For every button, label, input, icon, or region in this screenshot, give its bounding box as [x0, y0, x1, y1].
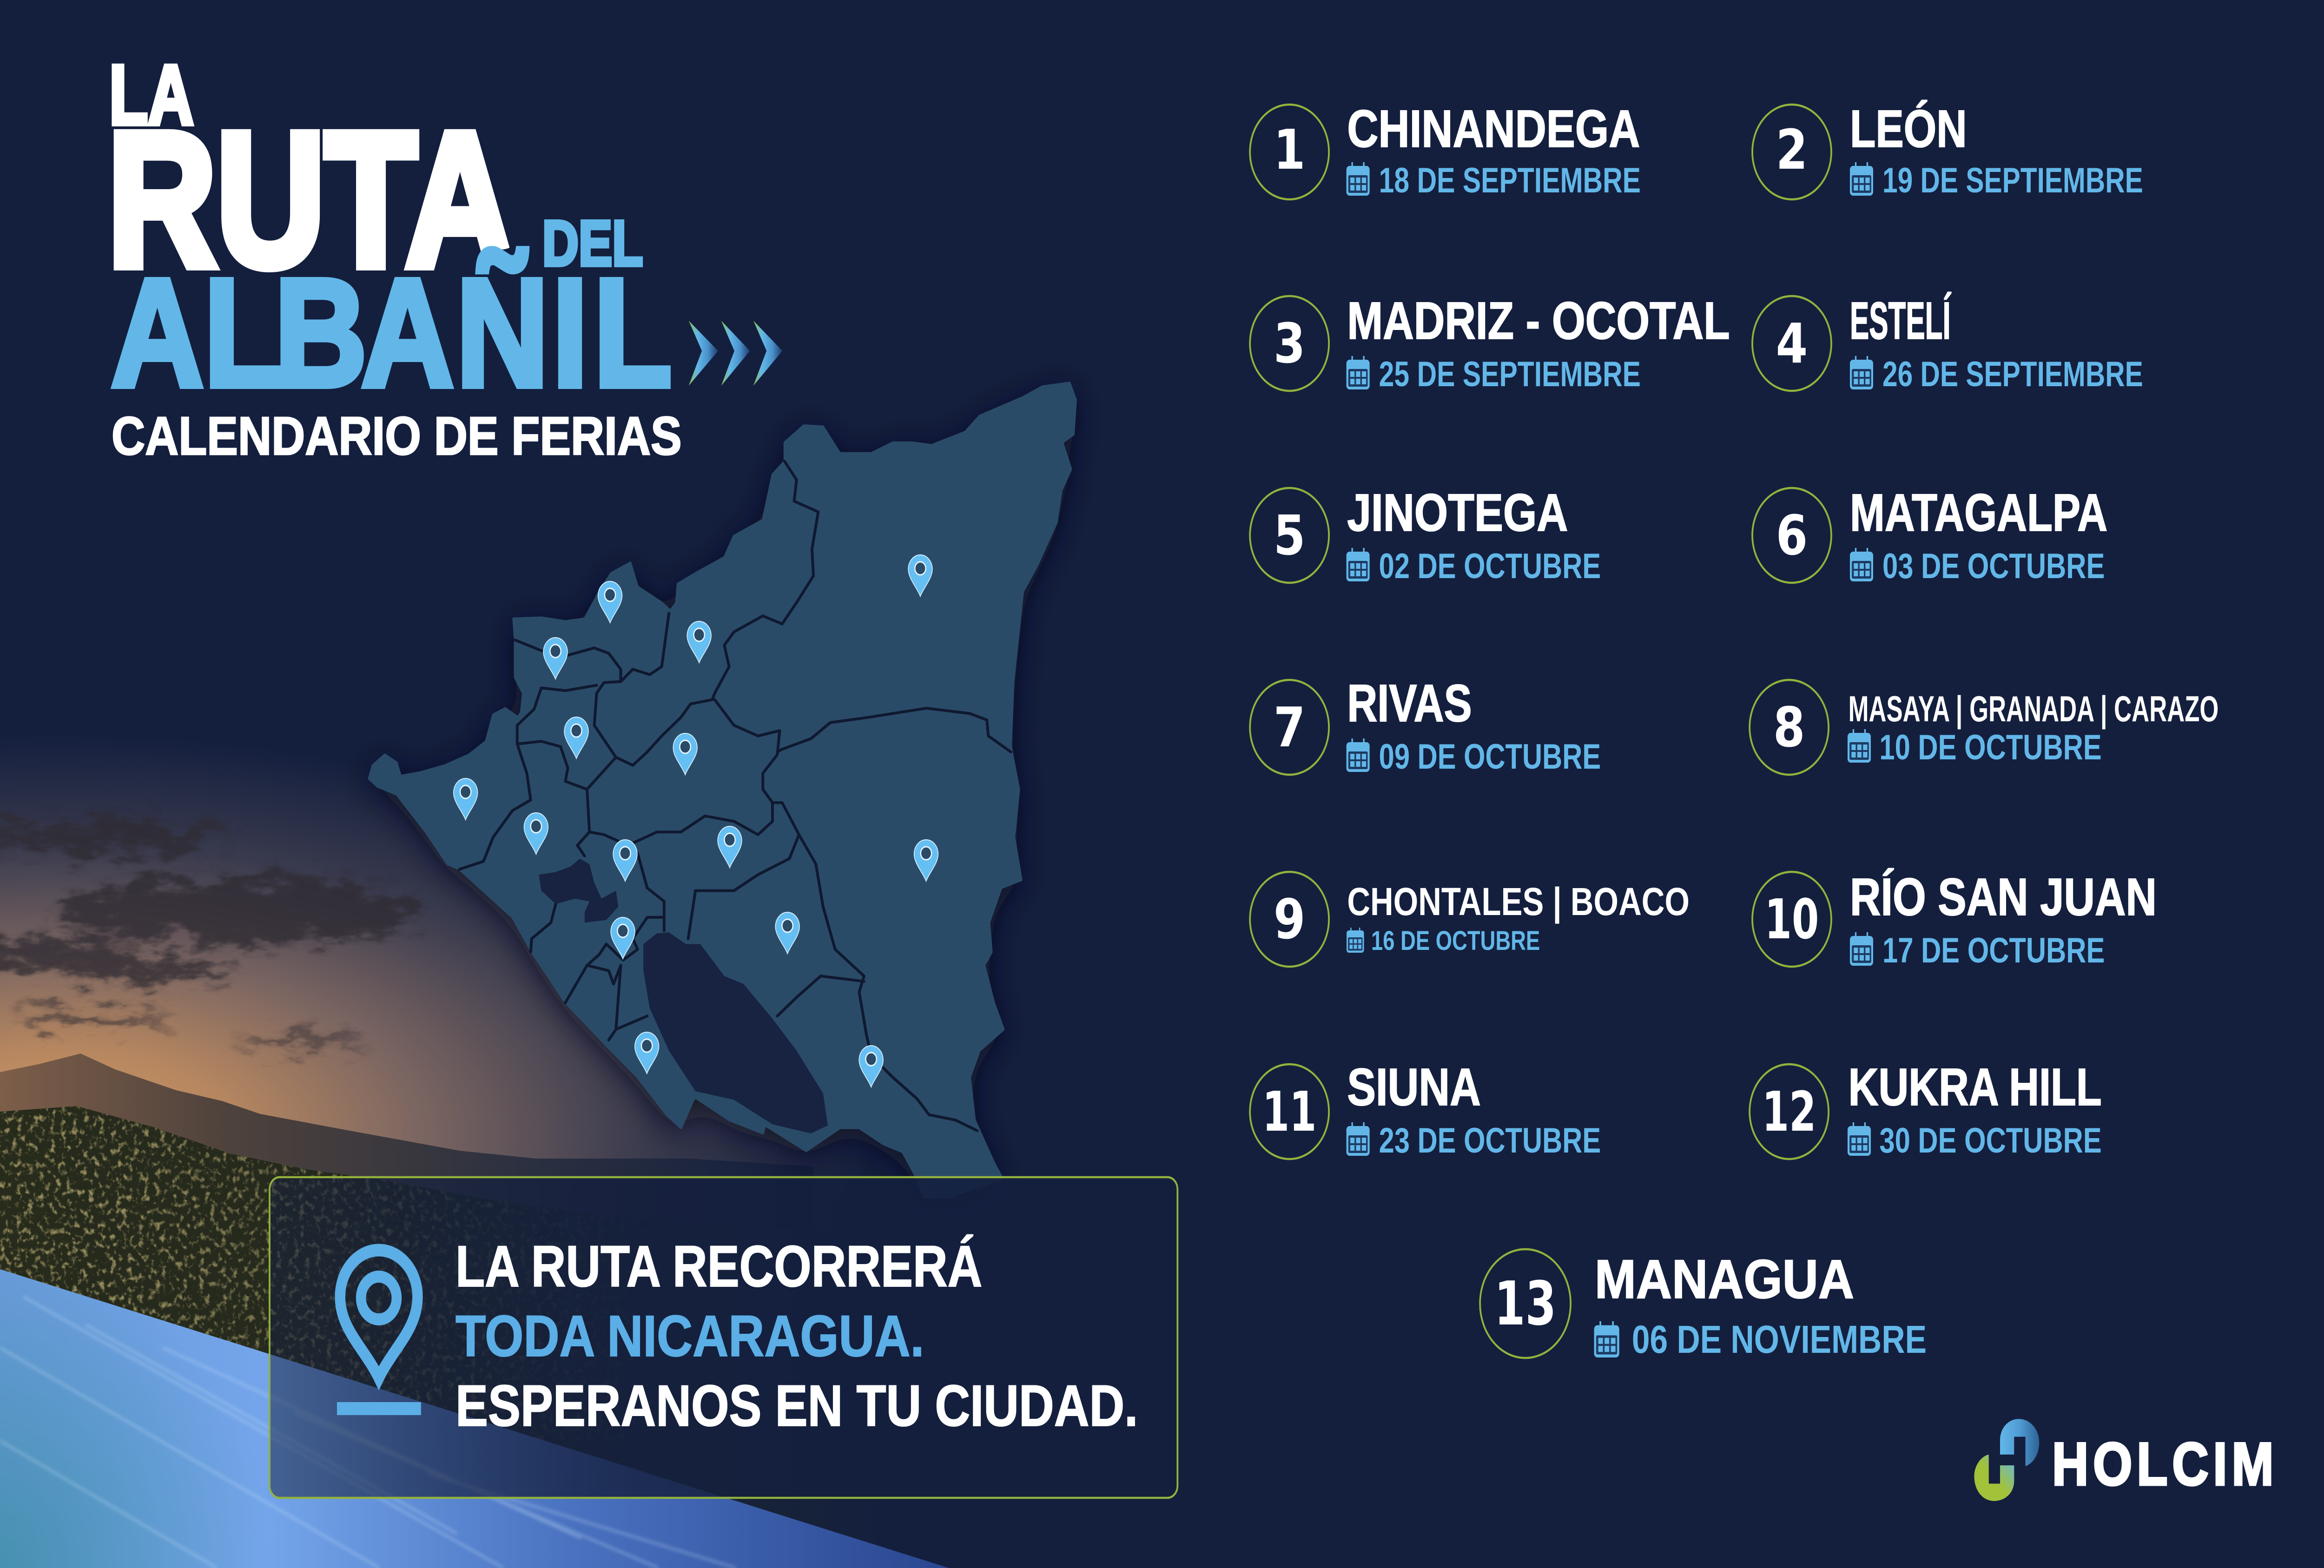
stop 10: Río San Juan: RÍO SAN JUAN: [1850, 868, 2157, 927]
stop 4: Estelí: 4: [1776, 311, 1808, 376]
stop 6: Matagalpa: 03 DE OCTUBRE: [1882, 547, 2105, 586]
stop 5: Jinotega: 5: [1274, 503, 1305, 567]
stop 11: Siuna: 23 DE OCTUBRE: [1379, 1121, 1601, 1160]
sky: [0, 725, 1046, 1236]
stop 2: León: 2: [1776, 118, 1808, 182]
department borders: [459, 461, 1011, 1131]
title: [108, 48, 682, 466]
stop 4: Estelí: [1752, 292, 2143, 394]
stop 2: León: [1752, 100, 2143, 200]
stop 10: Río San Juan: 10: [1765, 887, 1819, 951]
stop 12: Kukra Hill: 30 DE OCTUBRE: [1879, 1121, 2102, 1160]
stop 3: Madriz - Ocotal: 25 DE SEPTIEMBRE: [1379, 355, 1641, 394]
teal corner: [0, 1269, 949, 1568]
stop 10: Río San Juan: [1752, 868, 2157, 970]
mountains: [0, 1054, 813, 1301]
title: ALBAÑIL: ALBAÑIL: [111, 247, 672, 419]
stop 13: Managua: 06 DE NOVIEMBRE: [1632, 1318, 1927, 1361]
stop 11: Siuna: [1250, 1058, 1601, 1160]
map location pins: [454, 555, 938, 1087]
arrows: [689, 321, 782, 386]
clouds: [0, 820, 422, 1046]
stop 9: Chontales, Boaco: [1250, 872, 1690, 967]
stop 11: Siuna: SIUNA: [1347, 1058, 1481, 1117]
callout text line 3: ESPERANOS EN TU CIUDAD.: [456, 1374, 1138, 1438]
stop 1: Chinandega: 1: [1274, 118, 1305, 182]
stop 12: Kukra Hill: 12: [1762, 1080, 1816, 1144]
title: DEL: DEL: [542, 207, 643, 279]
callout text line 1: LA RUTA RECORRERÁ: [456, 1234, 982, 1299]
callout text line 2: TODA NICARAGUA.: [456, 1304, 924, 1369]
stop 8: Masaya, Granada, Carazo: MASAYA | GRANADA | CARAZO: [1849, 689, 2218, 729]
icon: location pin: [337, 1250, 421, 1415]
stop 5: Jinotega: JINOTEGA: [1347, 484, 1568, 542]
stop 11: Siuna: 11: [1262, 1080, 1317, 1144]
stop 13: Managua: [1480, 1249, 1927, 1361]
stop 1: Chinandega: CHINANDEGA: [1347, 100, 1640, 158]
stop 2: León: LEÓN: [1850, 100, 1967, 158]
tilde notch: [482, 244, 515, 272]
stop 7: Rivas: 09 DE OCTUBRE: [1379, 737, 1601, 776]
forest: [0, 1106, 891, 1568]
logo mark: [1974, 1419, 2039, 1501]
stop 1: Chinandega: [1250, 100, 1641, 200]
Lake Nicaragua: [643, 932, 828, 1133]
stop 12: Kukra Hill: KUKRA HILL: [1849, 1058, 2102, 1117]
stop 7: Rivas: 7: [1274, 695, 1305, 759]
stop 5: Jinotega: [1250, 484, 1601, 586]
stop 4: Estelí: 26 DE SEPTIEMBRE: [1882, 355, 2143, 394]
stop 8: Masaya, Granada, Carazo: [1750, 680, 2218, 775]
blue solar surface: [0, 1269, 949, 1568]
Holcim logo: [1974, 1419, 2274, 1501]
stop 3: Madriz - Ocotal: [1250, 292, 1730, 394]
stop 5: Jinotega: 02 DE OCTUBRE: [1379, 547, 1601, 586]
panel box: [270, 1177, 1177, 1498]
stop 9: Chontales, Boaco: CHONTALES | BOACO: [1347, 880, 1690, 923]
map of Nicaragua: [369, 383, 1076, 1198]
subtitle: CALENDARIO DE FERIAS: [112, 406, 682, 466]
callout panel: [270, 1177, 1177, 1498]
stop 13: Managua: MANAGUA: [1595, 1249, 1854, 1310]
stop 9: Chontales, Boaco: 9: [1274, 887, 1305, 951]
stop 10: Río San Juan: 17 DE OCTUBRE: [1882, 931, 2105, 970]
stop 2: León: 19 DE SEPTIEMBRE: [1882, 161, 2143, 200]
stop 9: Chontales, Boaco: 16 DE OCTUBRE: [1371, 926, 1540, 956]
stop 3: Madriz - Ocotal: 3: [1274, 311, 1305, 376]
title: RUTA: RUTA: [108, 92, 515, 306]
stop 8: Masaya, Granada, Carazo: 8: [1773, 695, 1805, 759]
stop 6: Matagalpa: 6: [1776, 503, 1808, 567]
stop 4: Estelí: ESTELÍ: [1850, 292, 1952, 350]
stop 13: Managua: 13: [1494, 1269, 1556, 1339]
stop 7: Rivas: [1250, 674, 1601, 776]
stop 12: Kukra Hill: [1750, 1058, 2102, 1160]
stop 8: Masaya, Granada, Carazo: 10 DE OCTUBRE: [1879, 728, 2102, 767]
title: LA: LA: [109, 48, 194, 142]
forest sunlit texture: [0, 1106, 697, 1441]
country shape: [369, 383, 1076, 1198]
stop 7: Rivas: RIVAS: [1347, 674, 1472, 733]
stop 6: Matagalpa: MATAGALPA: [1850, 484, 2107, 542]
stop 6: Matagalpa: [1752, 484, 2107, 586]
stop 1: Chinandega: 18 DE SEPTIEMBRE: [1379, 161, 1641, 200]
surface streaks: [0, 1297, 736, 1568]
stop 3: Madriz - Ocotal: MADRIZ - OCOTAL: [1347, 292, 1730, 350]
photo: sunset landscape: [0, 725, 1046, 1568]
logo wordmark: HOLCIM: [2052, 1431, 2274, 1498]
Lake Managua: [539, 859, 618, 922]
